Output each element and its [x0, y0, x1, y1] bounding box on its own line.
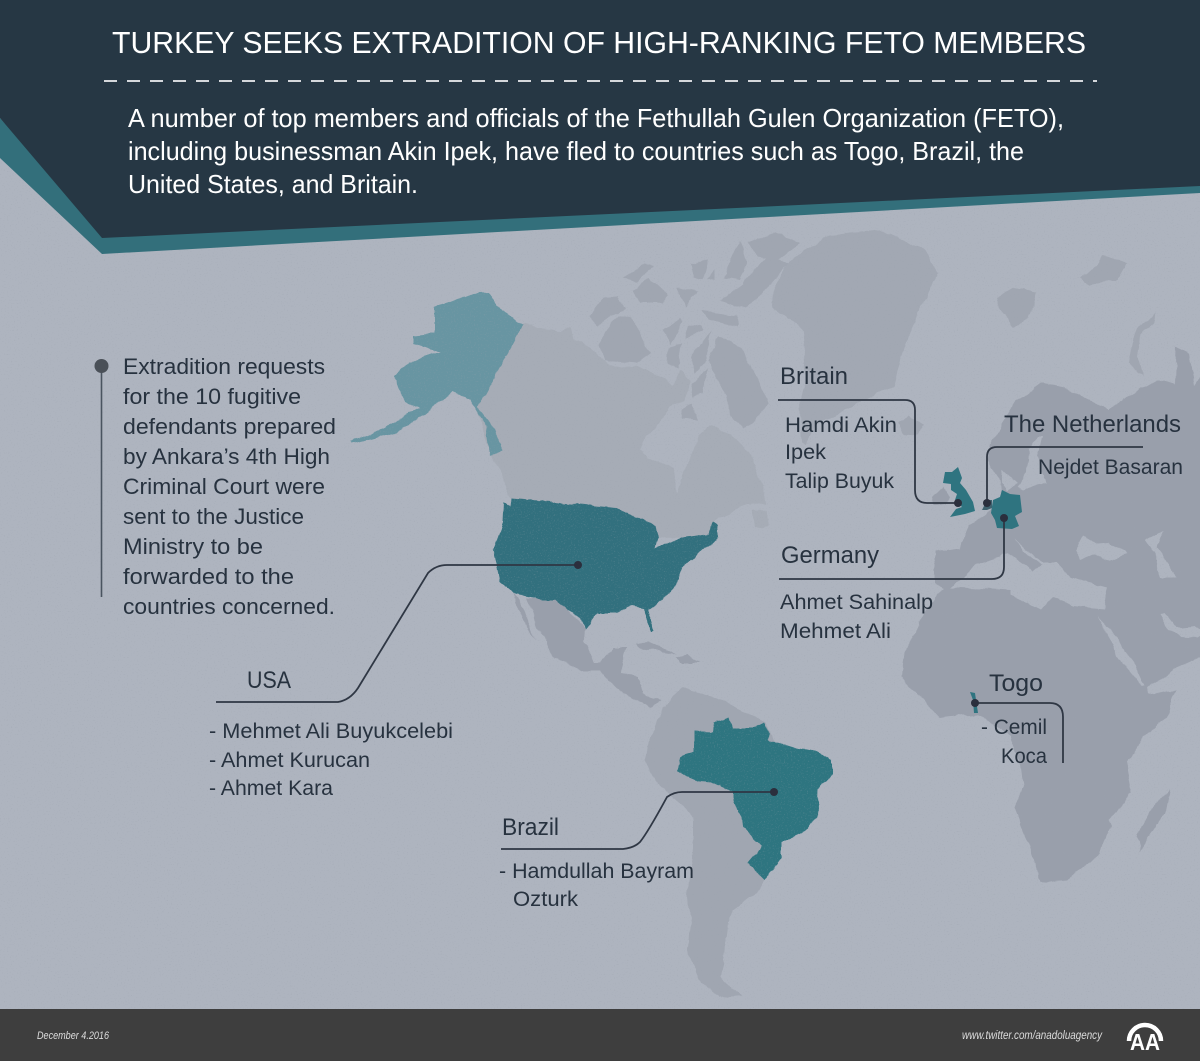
callout: Germany: [779, 514, 1008, 643]
extradition note: Ministry to be: [123, 534, 263, 559]
title: TURKEY SEEKS EXTRADITION OF HIGH-RANKING FETO MEMBERS: [112, 25, 1086, 60]
footer: [0, 1009, 1200, 1061]
callout: The Netherlands: [983, 411, 1183, 507]
icon: agency logo: AA: [1130, 1029, 1160, 1055]
extradition note: countries concerned.: [123, 594, 335, 619]
source link: www.twitter.com/anadoluagency: [962, 1030, 1103, 1042]
callout: Brazil: Brazil: [502, 814, 559, 841]
extradition note: by Ankara’s 4th High: [123, 444, 330, 469]
small highlighted countries: [943, 467, 1022, 713]
callout: Britain: Talip Buyuk: [785, 469, 894, 493]
callout: Togo: - Cemil: [981, 715, 1047, 739]
extradition note: [94, 354, 336, 619]
callout: Britain: [778, 363, 962, 507]
callout: Germany: Mehmet Ali: [780, 619, 891, 643]
extradition note: sent to the Justice: [123, 504, 304, 529]
country: USA: [493, 498, 719, 632]
country: Alaska: [350, 292, 523, 455]
extradition note: Criminal Court were: [123, 474, 325, 499]
callout: Britain: Hamdi Akin: [785, 413, 897, 437]
intro text: United States, and Britain.: [128, 169, 418, 199]
land: South America: [645, 688, 790, 997]
land: Ireland: [933, 487, 950, 507]
land: Iceland: [898, 417, 923, 435]
teal strip: [0, 118, 1200, 254]
callout: The Netherlands: The Netherlands: [1004, 411, 1181, 438]
extradition note: Extradition requests: [123, 354, 325, 379]
callout: Britain: Britain: [780, 363, 848, 390]
dark panel: [0, 0, 1200, 238]
world map: [350, 230, 1200, 997]
callout: Britain: Ipek: [785, 440, 826, 464]
callout: Togo: Koca: [1001, 744, 1047, 768]
land: Madagascar: [1138, 788, 1170, 850]
country: Togo: [970, 692, 978, 713]
land: Eurasia and Africa: [902, 348, 1200, 882]
callout: USA: - Ahmet Kurucan: [209, 748, 370, 772]
land: Arctic Russia islands: [997, 257, 1157, 375]
callout: Togo: Togo: [989, 670, 1043, 697]
land: Greenland: [772, 230, 938, 447]
seas: [950, 437, 1200, 687]
intro text: [128, 103, 1064, 199]
extradition note: defendants prepared: [123, 414, 336, 439]
date: December 4.2016: [37, 1030, 110, 1042]
extradition note: for the 10 fugitive: [123, 384, 301, 409]
country: Germany: [991, 490, 1022, 529]
intro text: A number of top members and officials of the Fethullah Gulen Organization (FETO),: [128, 103, 1064, 133]
country: Brazil: [677, 717, 832, 880]
country: Britain: [943, 467, 975, 517]
callout: The Netherlands: Nejdet Basaran: [1038, 455, 1183, 479]
callout: USA: [209, 561, 582, 800]
callout: USA: - Mehmet Ali Buyukcelebi: [209, 719, 453, 743]
country: Netherlands: [982, 500, 992, 510]
land: Canada: [478, 325, 770, 537]
callout: Togo: [971, 670, 1063, 768]
callout: USA: USA: [247, 667, 291, 694]
callout: Brazil: Ozturk: [513, 887, 578, 911]
land: Mexico and Central America: [513, 593, 700, 707]
callout: Germany: Germany: [781, 542, 879, 569]
header band: [0, 0, 1200, 254]
intro text: including businessman Akin Ipek, have fled to countries such as Togo, Brazil, the: [128, 136, 1024, 166]
callout: Germany: Ahmet Sahinalp: [780, 590, 933, 614]
callout: Brazil: - Hamdullah Bayram: [499, 859, 694, 883]
extradition note: forwarded to the: [123, 564, 294, 589]
callout: USA: - Ahmet Kara: [209, 776, 333, 800]
callout: Brazil: [499, 788, 778, 911]
land: Arctic islands: [588, 233, 800, 430]
